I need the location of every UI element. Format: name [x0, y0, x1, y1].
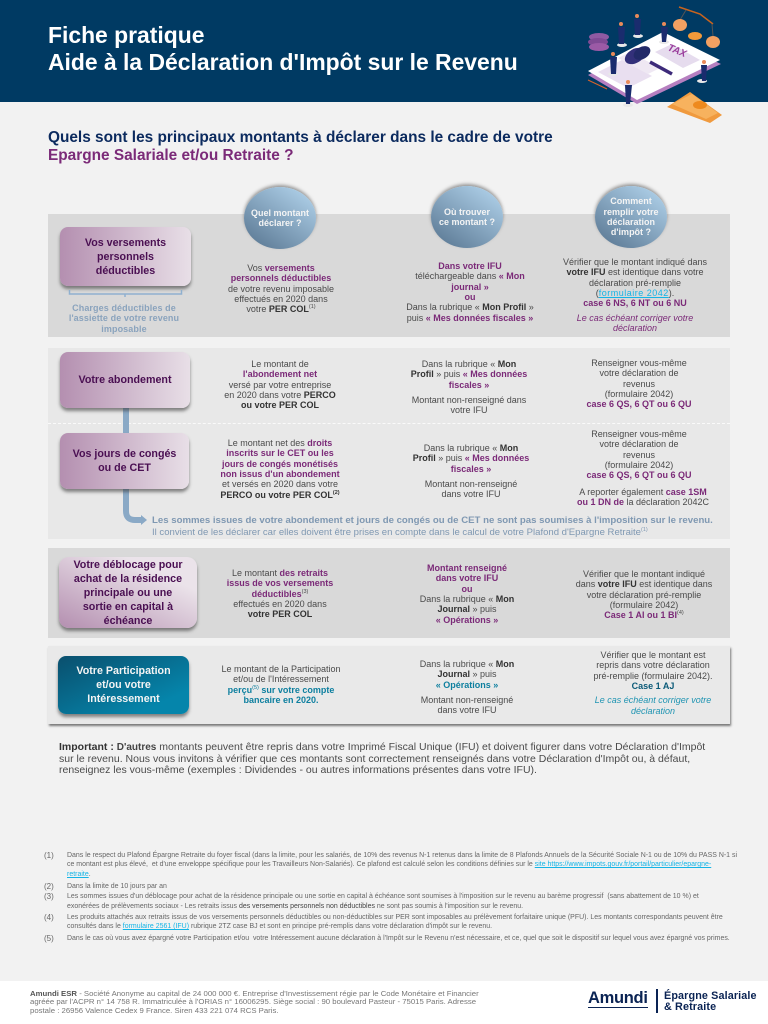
row 2 col 2 text: fiscales » Montant non-renseigné dans: [412, 380, 526, 405]
column header: où trouver: [431, 186, 503, 248]
section heading: [48, 129, 553, 164]
row 5 col 2 text: [420, 659, 514, 715]
row 1 col 1 text: de votre revenu imposable: [228, 284, 334, 294]
row 1 col 3 text: case 6 NS, 6 NT ou 6 NU Le cas échéant corriger votre: [577, 298, 693, 323]
footnotes: Dans le cas où vous avez épargné votre Participation et/ou votre Intéressement aucune déclaration à l'Impôt sur le Revenu n'est nécessaire, et ce, quel que soit le dispositif sur lequel vous avez épargné vos primes.: [67, 935, 730, 942]
row 5 col 3 text: Case 1 AJ Le cas échéant corriger votre: [595, 681, 711, 705]
footer band: [0, 981, 768, 1024]
column header: comment remplir: d'impôt ?: [611, 227, 651, 237]
logo: Amundi Épargne Salariale & Retraite: [588, 989, 757, 1013]
footnotes: (1): [44, 851, 54, 860]
note: charges déductibles: imposable: [101, 324, 147, 334]
important note: [59, 741, 706, 776]
row 4 col 1 text: issus de vos versements: [227, 578, 333, 588]
illustration: tax document with gavel, figures, coins, scale, banknotes: [588, 6, 722, 123]
row 3 col 3 text: (formulaire 2042): [605, 460, 673, 470]
row 5 col 1 text: Le montant de la Participation: [221, 664, 341, 674]
row 4 col 2 text: ou: [462, 584, 472, 594]
row 4 col 2 text: dans votre IFU: [436, 573, 498, 583]
column header: où trouver: Où trouver: [444, 207, 490, 217]
title: [48, 22, 518, 75]
column header: quel montant: déclarer ?: [258, 218, 302, 228]
note: sommes non soumises: [152, 515, 713, 538]
row 1 col 2 text: ou: [464, 292, 476, 302]
column header: quel montant: [244, 187, 316, 249]
header band: [0, 0, 768, 102]
row 2 col 2 text: Dans la rubrique « Mon: [422, 359, 516, 369]
title: Fiche pratique: [48, 22, 204, 48]
row 3 col 2 text: Profil » puis « Mes données: [413, 453, 529, 463]
footnotes: Dans le respect du Plafond Épargne Retraite du foyer fiscal (dans la limite, pour les salariés, de 10% des revenus N-1 retenus dans la limite de 8 Plafonds Annuels de la Sécurité Sociale N-1 ou de 10% du PASS N-1 si: [67, 852, 737, 859]
row 2 col 3 text: votre déclaration de: [599, 368, 679, 378]
footnotes: [44, 850, 737, 943]
row 4 col 2 text: Journal » puis: [437, 604, 497, 614]
row 4 col 3 text: [576, 569, 712, 620]
column header: comment remplir: déclaration: [607, 217, 655, 227]
row 2 col 3 text: (formulaire 2042): [605, 389, 673, 399]
row 1 col 3 text: votre IFU est identique dans votre: [566, 267, 704, 277]
legal text: Amundi ESR - Société Anonyme au capital de 24 000 000 €. Entreprise d'Investissement régie par le Code Monétaire et Financier: [30, 989, 479, 998]
row label: participation: Intéressement: [87, 693, 160, 705]
panel: participation: [48, 646, 730, 724]
row 1 col 2 text: Dans votre IFU: [438, 261, 502, 271]
footnotes: Les produits attachés aux retraits issus de vos versements personnels déductibles ou non-déductibles sur PER sont imposables au prélèvement forfaitaire unique (PFU). Les montants correspondants peuvent être: [67, 914, 723, 921]
row 3 col 2 text: fiscales » Montant non-renseigné: [425, 464, 517, 489]
row 5 col 3 text: [593, 650, 713, 716]
row 4 col 1 text: Le montant des retraits: [232, 568, 328, 578]
row 5 col 2 text: « Opérations » Montant non-renseigné: [421, 680, 513, 705]
footnotes: ce montant est plus élevé, et d'une enveloppe spécifique pour les Travailleurs Non-Salariés). Ce plafond est calculé selon les conditions définies sur le site https://www.impots.gouv.fr/portail/particulier/epargne-: [67, 861, 711, 868]
row 2 col 1 text: Le montant de: [251, 359, 309, 369]
row label: déblocage: échéance: [104, 614, 152, 626]
row 1 col 3 text: déclaration: [613, 323, 657, 333]
footnotes: retraite.: [67, 871, 91, 878]
row 3 col 3 text: [577, 429, 709, 507]
row label: versements: personnels: [97, 250, 154, 262]
row 5 col 3 text: déclaration: [631, 706, 675, 716]
row label: jours de congés: [60, 433, 189, 489]
row label: participation: et/ou votre: [96, 679, 151, 691]
row 4 col 1 text: déductibles(3): [252, 589, 308, 599]
row 1 col 1 text: votre PER COL(1): [246, 304, 316, 314]
row 2 col 2 text: Profil » puis « Mes données: [411, 369, 527, 379]
row 5 col 3 text: repris dans votre déclaration: [596, 660, 710, 670]
row 3 col 1 text: et versés en 2020 dans votre: [222, 479, 338, 489]
bracket: [68, 290, 182, 297]
row label: jours de congés: ou de CET: [98, 462, 151, 474]
title: Aide à la Déclaration d'Impôt sur le Revenu: [48, 49, 518, 75]
legal text: postale : 26956 Valence Cedex 9 France. Siren 433 221 074 RCS Paris.: [30, 1006, 279, 1015]
logo: Amundi Épargne Salariale & Retraite: Épargne Salariale: [664, 990, 757, 1002]
row 2 col 2 text: [411, 359, 527, 415]
row 4 col 3 text: votre déclaration pré-remplie: [587, 590, 701, 600]
row 2 col 2 text: votre IFU: [450, 405, 488, 415]
row 5 col 2 text: Dans la rubrique « Mon: [420, 659, 514, 669]
row label: déblocage: sortie en capital à: [83, 600, 173, 612]
row label: participation: [58, 656, 189, 714]
column header: où trouver: ce montant ?: [439, 217, 495, 227]
row 3 col 3 text: ou 1 DN de la déclaration 2042C: [577, 497, 709, 507]
column header: comment remplir: remplir votre: [603, 207, 659, 217]
footnotes: (2): [44, 882, 54, 891]
column header: comment remplir: Comment: [610, 196, 652, 206]
column header: comment remplir: [595, 186, 667, 248]
row 1 col 3 text: [563, 257, 707, 333]
note: charges déductibles: l'assiette de votre revenu: [69, 313, 179, 323]
row 1 col 2 text: Dans la rubrique « Mon Profil »: [406, 302, 534, 312]
row 1 col 3 text: Vérifier que le montant indiqué dans: [563, 257, 707, 267]
legal text: agréée par l'ACPR n° 14 758 R. Immatriculée à l'ORIAS n° 16006295. Siège social : 90 boulevard Pasteur - 75015 Paris. Adresse: [30, 997, 476, 1006]
row 1 col 2 text: téléchargeable dans « Mon: [415, 271, 525, 281]
row 3 col 1 text: inscrits sur le CET ou les: [226, 448, 334, 458]
illustration: tax document with gavel, figures, coins, scale, banknotes: TAX: [666, 43, 689, 60]
section heading: Epargne Salariale et/ou Retraite ?: [48, 147, 293, 164]
row 2 col 3 text: revenus: [623, 379, 655, 389]
column header: quel montant: Quel montant: [251, 208, 309, 218]
row 5 col 3 text: pré-remplie (formulaire 2042).: [593, 671, 713, 681]
row 1 col 3 text: (formulaire 2042).: [596, 288, 674, 298]
connector from abondement to note, with arrow: [123, 408, 147, 525]
row 4 col 2 text: Montant renseigné: [427, 563, 507, 573]
row 1 col 1 text: [228, 263, 334, 314]
row 5 col 1 text: et/ou de l'Intéressement: [233, 674, 329, 684]
footnotes: Les sommes issues d'un déblocage pour achat de la résidence principale ou une sortie en capital à échéance sont soumises à l'imposition sur le revenu au barème progressif (sans abattement de 10 %) et: [67, 893, 699, 900]
important note: sur le revenu. Nous vous invitons à vérifier que ces montants sont correctement renseignés dans votre Déclaration d'Impôt ou, à défaut,: [59, 753, 690, 765]
note: sommes non soumises: Les sommes issues de votre abondement et jours de congés ou de CET ne sont pas soumises à l'imposition sur le revenu.: [152, 515, 713, 526]
row 2 col 3 text: Renseigner vous-même: [591, 358, 687, 368]
row label: abondement: [60, 352, 190, 408]
row 3 col 1 text: PERCO ou votre PER COL(2): [220, 490, 340, 500]
row 1 col 1 text: effectués en 2020 dans: [234, 294, 328, 304]
row 2 col 1 text: ou votre PER COL: [241, 400, 319, 410]
row label: versements: déductibles: [96, 264, 155, 276]
row 4 col 3 text: Case 1 AI ou 1 BI(4): [604, 610, 684, 620]
footnotes: consultés dans le formulaire 2561 (IFU) rubrique 2TZ case BJ et sont en principe pré-remplis dans votre déclaration d'impôt sur le revenu.: [67, 923, 492, 930]
row 3 col 3 text: votre déclaration de: [599, 439, 679, 449]
row 4 col 2 text: Dans la rubrique « Mon: [420, 594, 514, 604]
row label: jours de congés: Vos jours de congés: [73, 448, 176, 460]
section heading: Quels sont les principaux montants à déclarer dans le cadre de votre: [48, 129, 553, 146]
row 4 col 1 text: [227, 568, 333, 619]
footnotes: exonérées de prélèvements sociaux - Les retraits issus des versements personnels non déductibles ne sont pas soumis à l'imposition sur le revenu.: [67, 903, 523, 910]
footnotes: (5): [44, 934, 54, 943]
row 3 col 3 text: A reporter également case 1SM: [579, 487, 707, 497]
note: charges déductibles: [69, 303, 179, 334]
row 4 col 3 text: Vérifier que le montant indiqué: [583, 569, 705, 579]
row 3 col 2 text: [413, 443, 529, 499]
row 1 col 3 text: déclaration pré-remplie: [589, 278, 681, 288]
row 2 col 1 text: l'abondement net: [243, 369, 317, 379]
note: charges déductibles: Charges déductibles de: [72, 303, 176, 313]
footnotes: Dans la limite de 10 jours par an: [67, 883, 167, 890]
row 5 col 1 text: bancaire en 2020.: [243, 695, 319, 705]
row 4 col 1 text: votre PER COL: [248, 609, 312, 619]
panel: déblocage: [48, 548, 730, 638]
row 3 col 3 text: Renseigner vous-même: [591, 429, 687, 439]
legal text: [30, 989, 479, 1015]
row 4 col 1 text: effectués en 2020 dans: [233, 599, 327, 609]
logo: Amundi Épargne Salariale & Retraite: Amundi: [588, 989, 648, 1007]
row label: abondement: Votre abondement: [78, 374, 172, 386]
row 3 col 1 text: [220, 438, 340, 500]
row 5 col 2 text: dans votre IFU: [437, 705, 497, 715]
footnotes: (4): [44, 913, 54, 922]
row 3 col 2 text: dans votre IFU: [441, 489, 501, 499]
row 1 col 2 text: journal »: [451, 282, 489, 292]
row 1 col 1 text: Vos versements: [247, 263, 315, 273]
row label: déblocage: [59, 557, 197, 628]
row 5 col 1 text: perçu(5) sur votre compte: [228, 685, 334, 695]
row label: déblocage: principale ou une: [84, 586, 172, 598]
important note: renseignez les vous-même (exemples : Dividendes - ou autres informations présentes dans votre IFU).: [59, 764, 537, 776]
row 4 col 2 text: « Opérations »: [436, 615, 498, 625]
row 4 col 3 text: dans votre IFU est identique dans: [576, 579, 712, 589]
row label: déblocage: Votre déblocage pour: [73, 558, 183, 570]
row 3 col 2 text: Dans la rubrique « Mon: [424, 443, 518, 453]
panel: abondement et jours de congés: [48, 348, 730, 539]
row 2 col 3 text: [586, 358, 692, 409]
row 3 col 3 text: case 6 QS, 6 QT ou 6 QU: [586, 470, 692, 480]
note: sommes non soumises: Il convient de les déclarer car elles doivent être prises en compte dans le calcul de votre Plafond d'Epargne Retraite(1): [152, 527, 648, 538]
panel: versements personnels déductibles: [48, 214, 730, 337]
row label: versements: [60, 227, 191, 286]
row 4 col 2 text: [420, 563, 514, 625]
logo: Amundi Épargne Salariale & Retraite: & Retraite: [664, 1000, 716, 1012]
row label: versements: Vos versements: [85, 236, 166, 248]
important note: Important : D'autres montants peuvent être repris dans votre Imprimé Fiscal Unique (IFU) et doivent figurer dans votre Déclaration d'Impôt: [59, 741, 705, 753]
row 2 col 1 text: en 2020 dans votre PERCO: [224, 390, 336, 400]
row label: déblocage: achat de la résidence: [74, 572, 182, 584]
row 2 col 1 text: versé par votre entreprise: [229, 380, 331, 390]
row 1 col 1 text: personnels déductibles: [231, 273, 331, 283]
row 5 col 2 text: Journal » puis: [437, 669, 497, 679]
row label: participation: Votre Participation: [76, 665, 171, 677]
row 2 col 3 text: case 6 QS, 6 QT ou 6 QU: [586, 399, 692, 409]
row 1 col 2 text: [406, 261, 534, 323]
footnotes: (3): [44, 892, 54, 901]
row 3 col 1 text: non issus d'un abondement: [220, 469, 340, 479]
row 1 col 2 text: puis « Mes données fiscales »: [407, 313, 533, 323]
row 3 col 1 text: jours de congés monétisés: [222, 459, 338, 469]
row 4 col 3 text: (formulaire 2042): [610, 600, 678, 610]
row 3 col 1 text: Le montant net des droits: [228, 438, 332, 448]
row 5 col 1 text: [221, 664, 341, 705]
row 5 col 3 text: Vérifier que le montant est: [600, 650, 706, 660]
row 2 col 1 text: [224, 359, 336, 410]
row 3 col 3 text: revenus: [623, 450, 655, 460]
